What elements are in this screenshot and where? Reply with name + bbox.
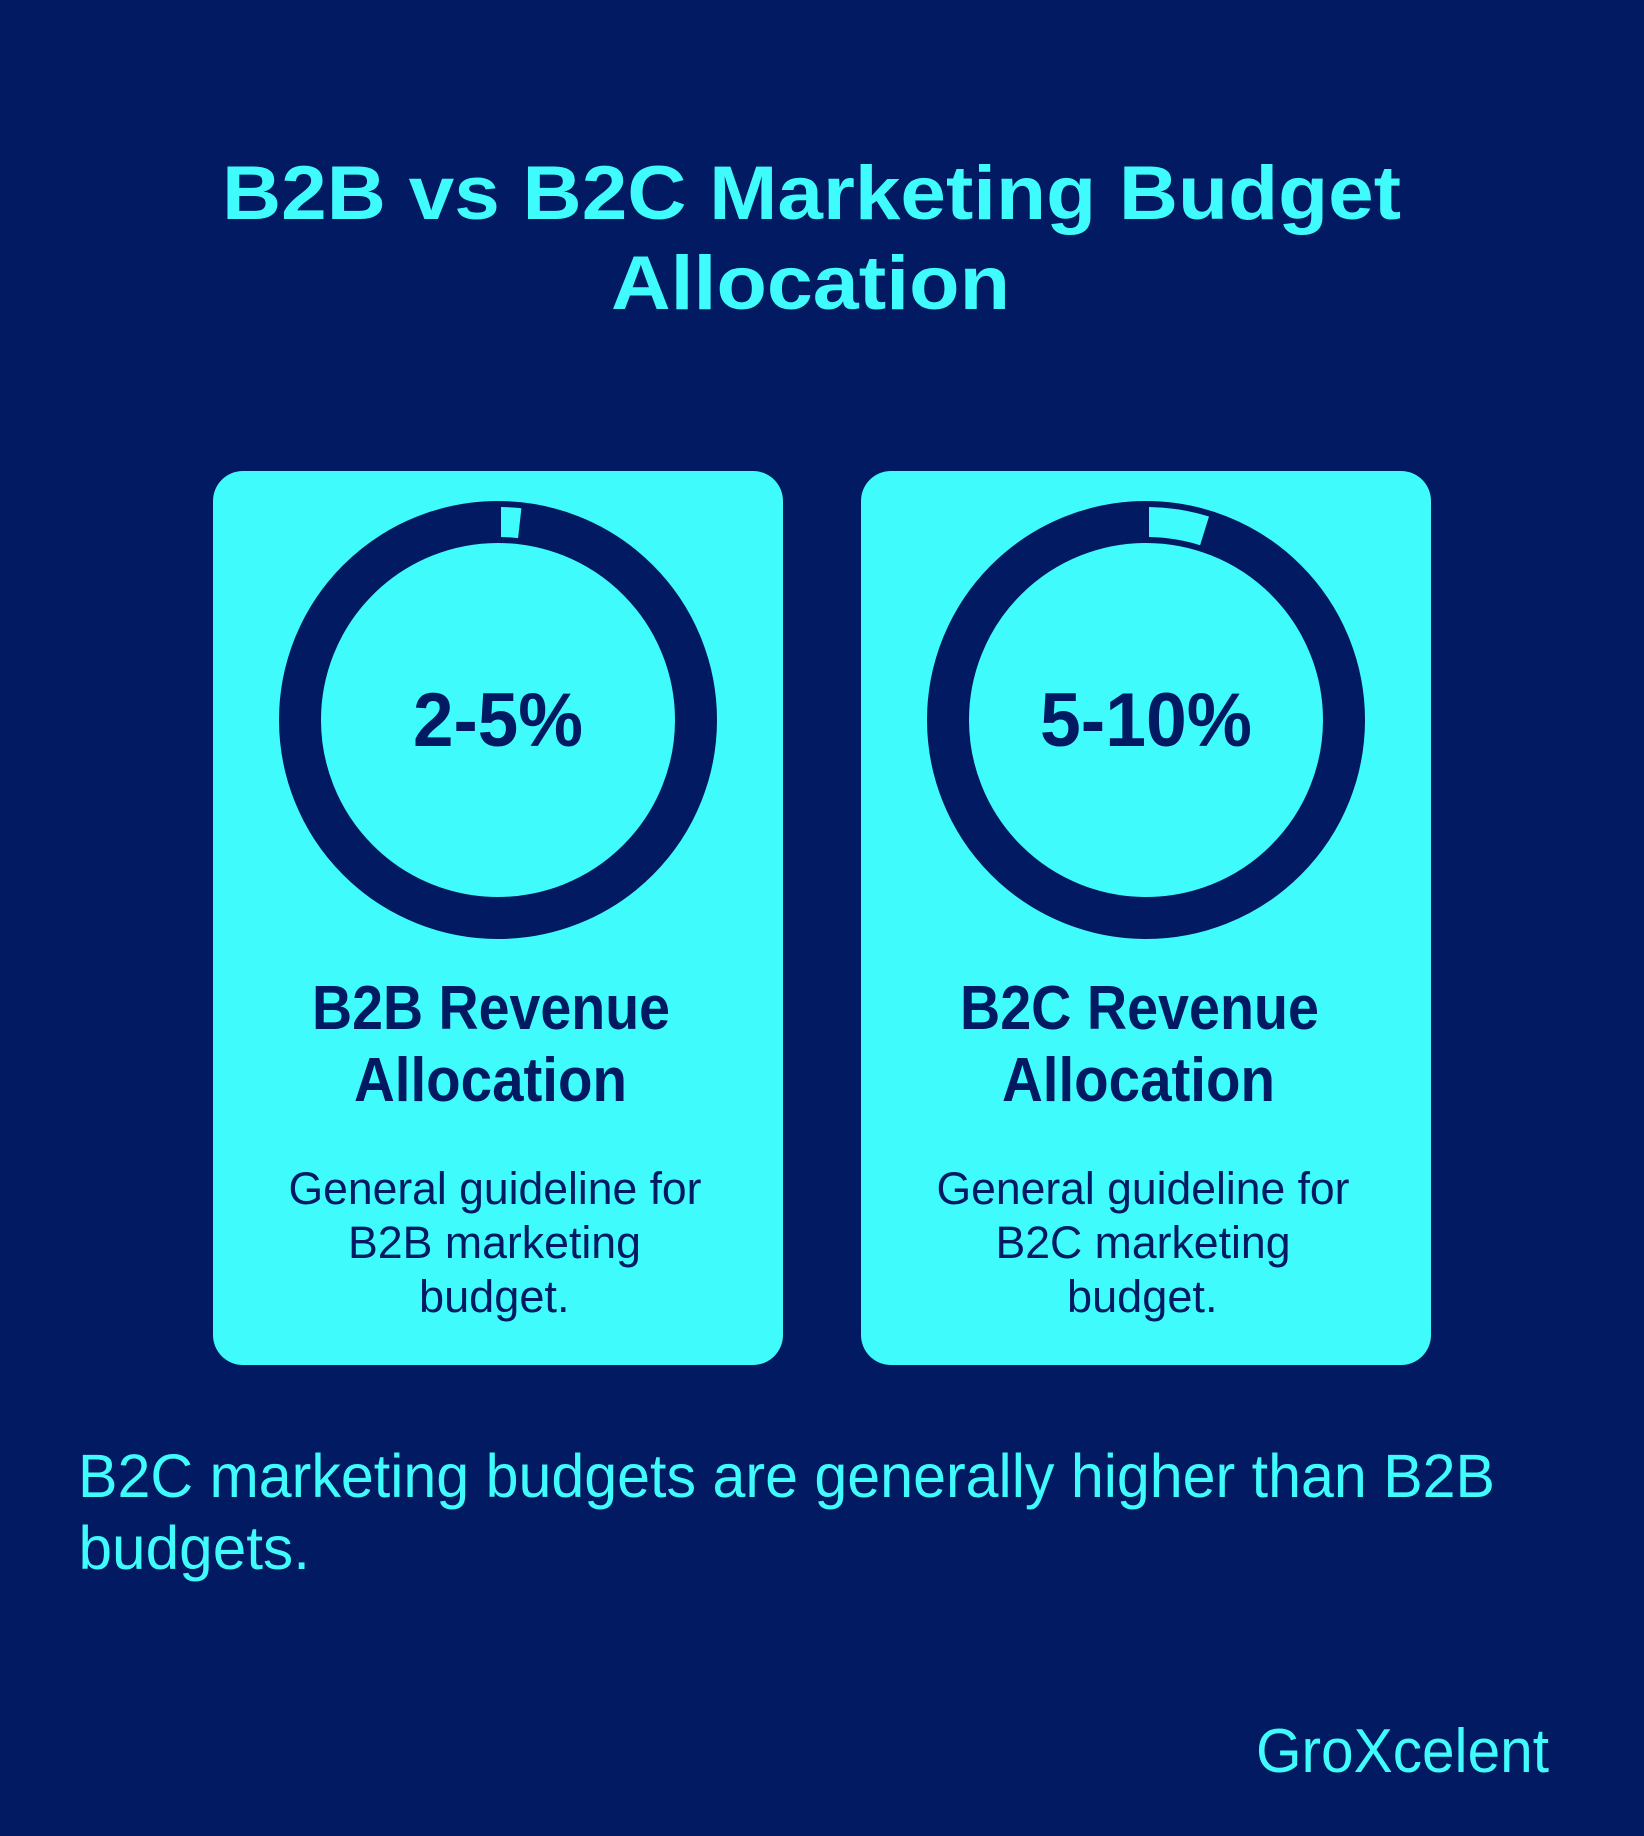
heading: B2B Revenue Allocation: Allocation bbox=[354, 1046, 627, 1115]
title: B2B vs B2C Marketing Budget bbox=[222, 151, 1401, 236]
description: B2C guideline: B2C marketing bbox=[996, 1217, 1290, 1268]
description: B2B guideline bbox=[288, 1163, 702, 1322]
description: B2B guideline: General guideline for bbox=[288, 1163, 702, 1214]
title: Allocation bbox=[611, 241, 1010, 326]
value: 5-10%: 5-10% bbox=[1040, 678, 1252, 763]
heading: B2C Revenue Allocation bbox=[960, 974, 1319, 1115]
heading: B2C Revenue Allocation: B2C Revenue bbox=[960, 974, 1319, 1043]
donut gauge: B2B 2-5% bbox=[300, 507, 696, 918]
title bbox=[222, 151, 1401, 326]
brand: GroXcelent: GroXcelent bbox=[1256, 1717, 1549, 1786]
summary text bbox=[78, 1442, 1495, 1582]
heading: B2C Revenue Allocation: Allocation bbox=[1002, 1046, 1275, 1115]
description: B2C guideline bbox=[936, 1163, 1350, 1322]
description: B2C guideline: budget. bbox=[1067, 1271, 1218, 1322]
summary text: budgets. bbox=[78, 1514, 310, 1582]
panel: B2C revenue allocation bbox=[861, 471, 1431, 1365]
panel: B2B revenue allocation bbox=[213, 471, 783, 1365]
heading: B2B Revenue Allocation: B2B Revenue bbox=[312, 974, 670, 1043]
heading: B2B Revenue Allocation bbox=[312, 974, 670, 1115]
value: 2-5%: 2-5% bbox=[413, 678, 583, 763]
description: B2B guideline: B2B marketing bbox=[348, 1217, 641, 1268]
donut gauge: B2C 5-10% bbox=[948, 507, 1344, 918]
summary text: B2C marketing budgets are generally higher than B2B bbox=[78, 1442, 1495, 1510]
description: B2C guideline: General guideline for bbox=[936, 1163, 1350, 1214]
description: B2B guideline: budget. bbox=[419, 1271, 570, 1322]
